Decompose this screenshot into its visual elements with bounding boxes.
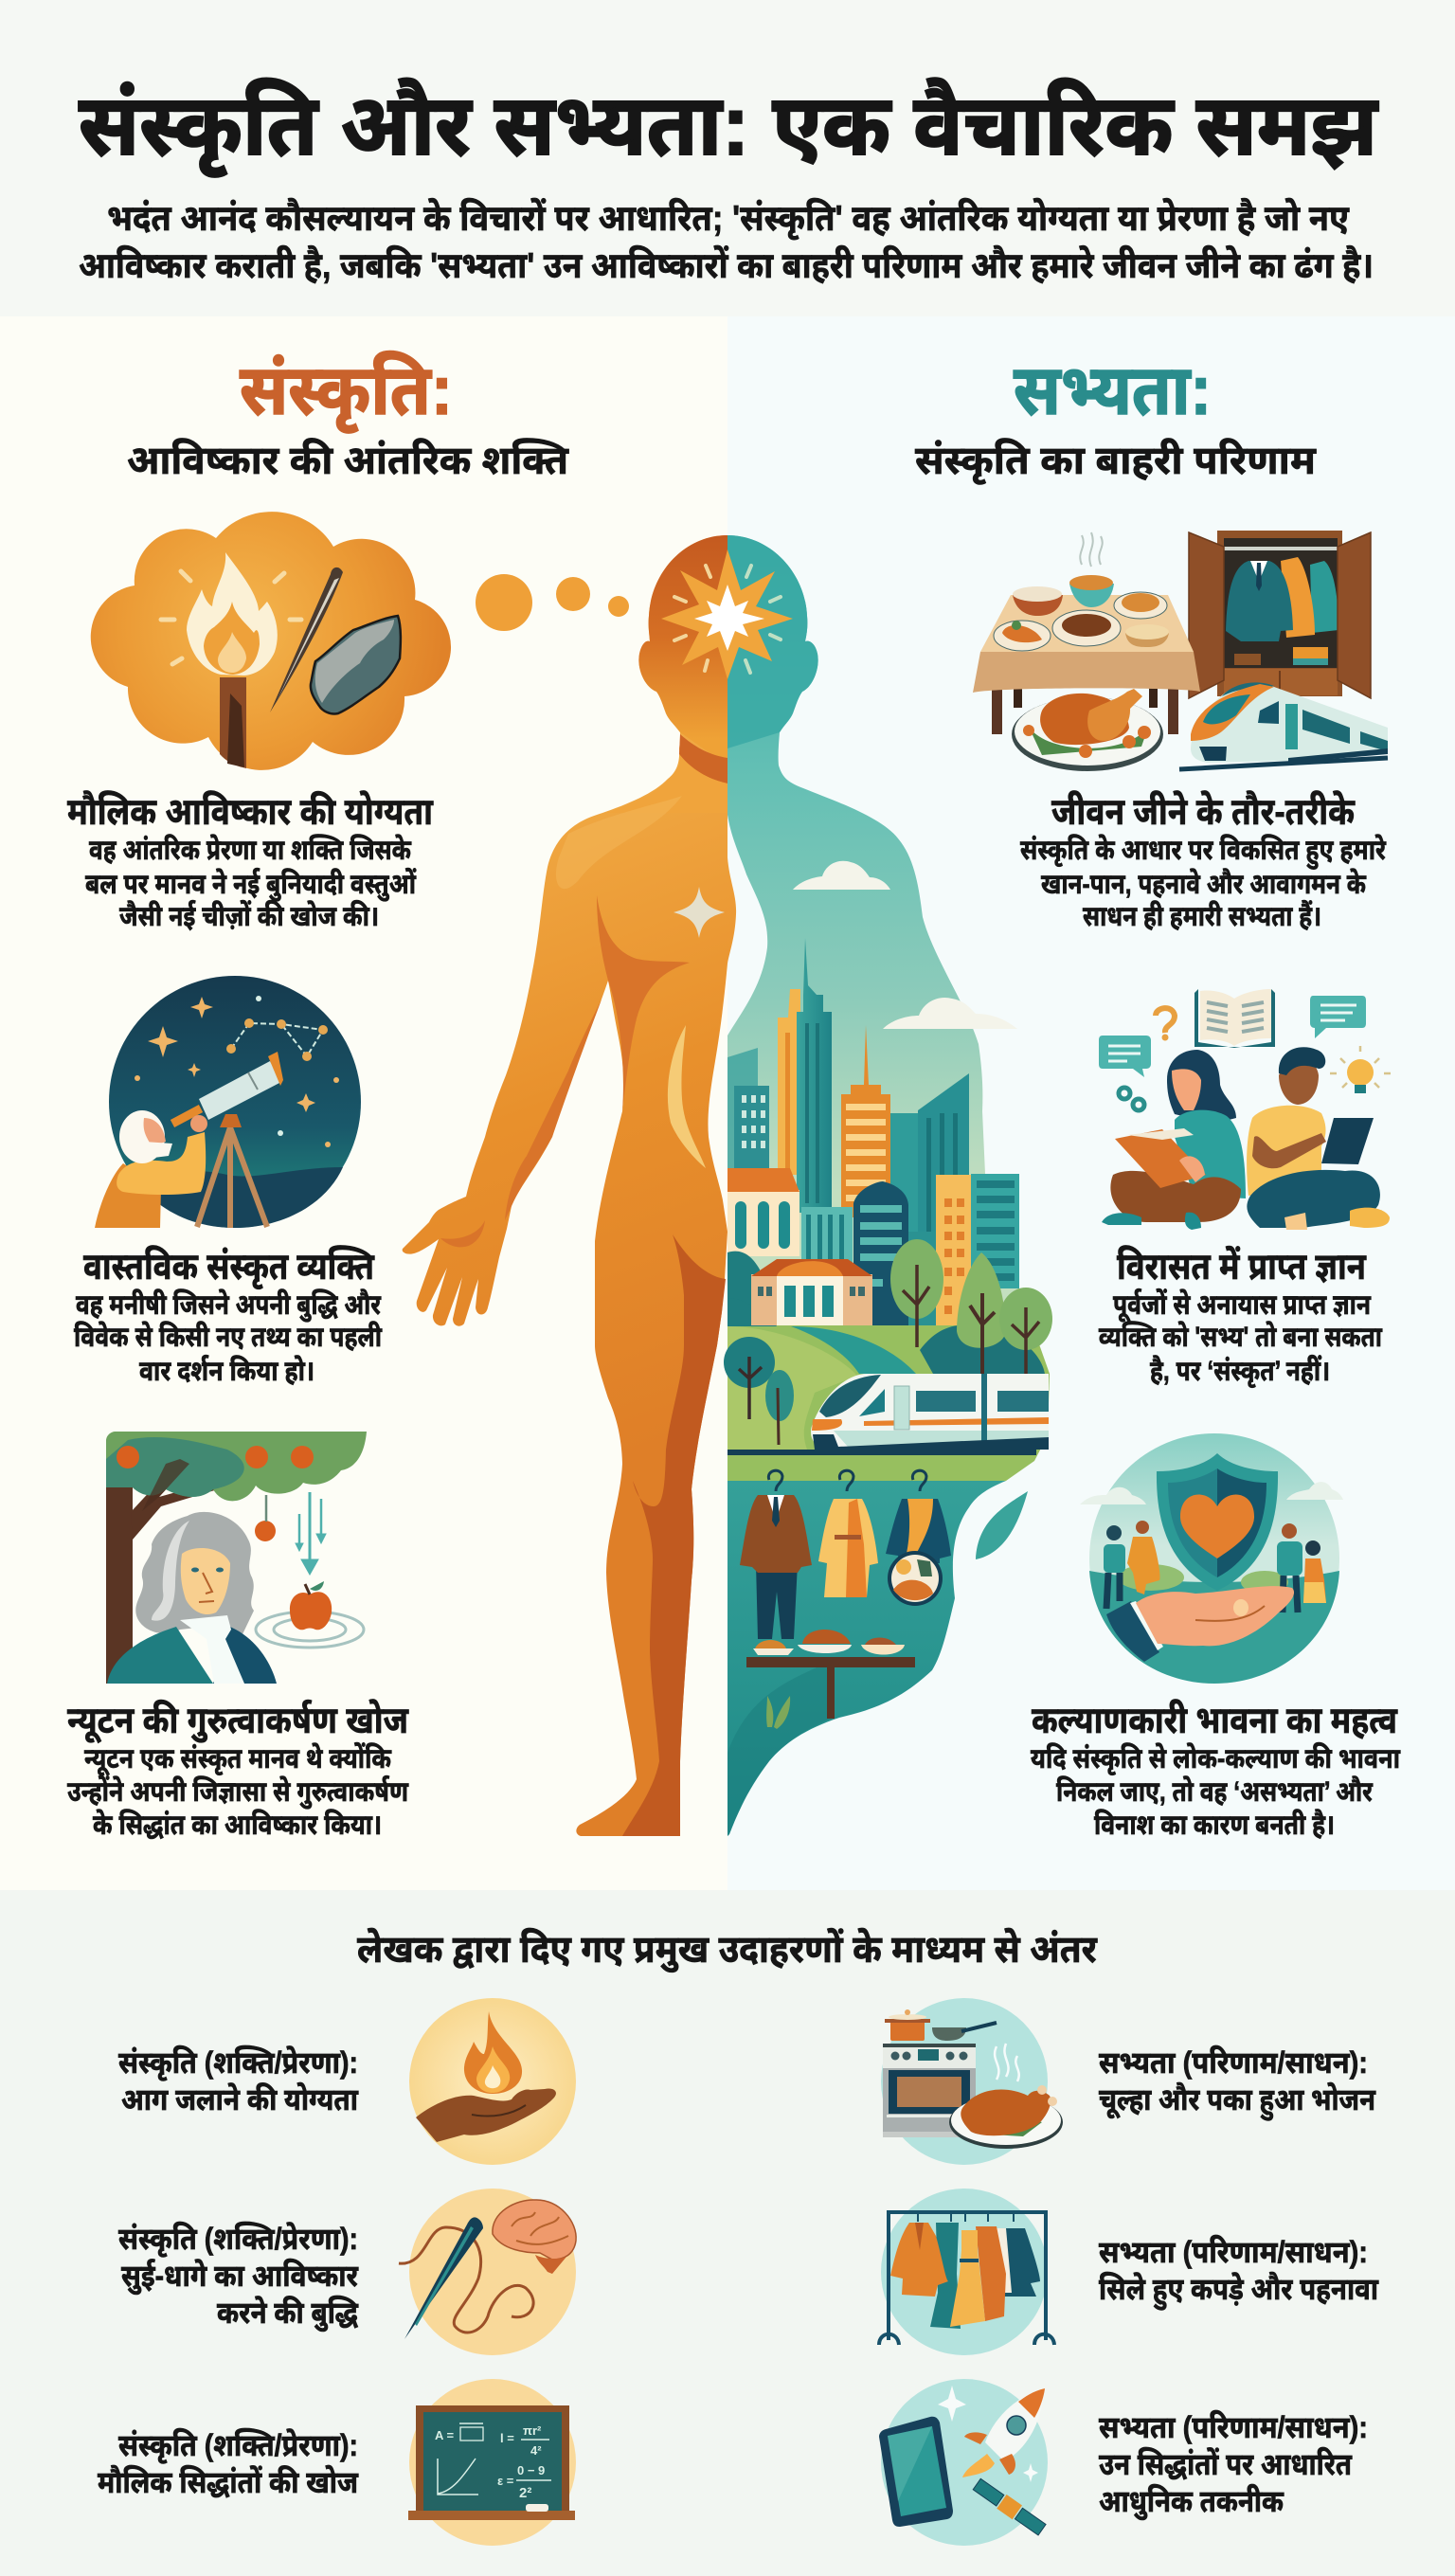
text: newton gravity discovery: न्यूटन की गुरुत्वाकर्षण खोज bbox=[67, 1700, 409, 1743]
text: ways of living bbox=[1020, 791, 1387, 932]
icon: blackboard with formulas: 0 − 9 bbox=[517, 2463, 545, 2477]
table with bowls bbox=[746, 1630, 915, 1719]
sparkle on chest bbox=[674, 887, 725, 938]
heading: sabhyata bbox=[915, 351, 1317, 485]
table bbox=[973, 595, 1200, 734]
text: true cultured person: वार दर्शन किया हो। bbox=[139, 1355, 314, 1387]
heading: sanskriti bbox=[127, 351, 569, 482]
heading: examples: लेखक द्वारा दिए गए प्रमुख उदाहरणों के माध्यम से अंतर bbox=[357, 1928, 1098, 1973]
orange half of body bbox=[403, 535, 736, 1836]
example left 1 text bbox=[118, 2045, 359, 2117]
suit on hanger bbox=[740, 1470, 812, 1639]
clouds bbox=[793, 861, 1017, 1029]
text: inherited knowledge: पूर्वजों से अनायास प्राप्त ज्ञान bbox=[1113, 1288, 1371, 1323]
needle bbox=[270, 567, 343, 712]
icon: blackboard with formulas: A = bbox=[435, 2428, 455, 2442]
light bulb bbox=[1330, 1046, 1391, 1093]
example right 2 text bbox=[1099, 2235, 1379, 2311]
shaded inner leg bbox=[622, 1234, 726, 1836]
example left 1 text: संस्कृति (शक्ति/प्रेरणा): bbox=[118, 2045, 358, 2081]
example left 1 text: आग जलाने की योग्यता bbox=[121, 2082, 359, 2117]
head split and mind burst star bbox=[661, 535, 818, 748]
panel: examples section bbox=[98, 1928, 1379, 2546]
torch with flame bbox=[161, 552, 301, 768]
coat on hanger bbox=[818, 1470, 878, 1597]
man with tablet bbox=[1247, 1047, 1390, 1230]
satellite bbox=[972, 2477, 1047, 2537]
example left 3 text: संस्कृति (शक्ति/प्रेरणा): bbox=[118, 2428, 358, 2464]
text: importance of welfare bbox=[1031, 1700, 1401, 1841]
text: true cultured person: वास्तविक संस्कृत व्यक्ति bbox=[83, 1246, 375, 1289]
small plants bbox=[766, 1696, 790, 1729]
text: original invention ability: वह आंतरिक प्रेरणा या शक्ति जिसके bbox=[89, 833, 412, 866]
example right 3 text bbox=[1099, 2410, 1368, 2520]
panel: header bbox=[79, 78, 1379, 286]
plate of food bbox=[888, 1551, 943, 1606]
heading: sanskriti: संस्कृति: bbox=[240, 351, 453, 434]
icon: needle thread and brain bbox=[399, 2189, 576, 2355]
telescope bbox=[199, 1061, 281, 1120]
icon: shield heart and caring hand bbox=[1080, 1433, 1343, 1684]
text: importance of welfare: कल्याणकारी भावना का महत्व bbox=[1032, 1700, 1398, 1741]
example right 1 text bbox=[1099, 2045, 1376, 2121]
floating leaf bbox=[976, 1491, 1028, 1559]
big apple bbox=[290, 1592, 332, 1630]
text: ways of living: खान-पान, पहनावे और आवागमन के bbox=[1041, 867, 1367, 900]
teal half of body with city scene bbox=[724, 535, 1052, 1836]
icon: blackboard with formulas: l = bbox=[500, 2431, 514, 2445]
text: ways of living: संस्कृति के आधार पर विकसित हुए हमारे bbox=[1020, 833, 1387, 870]
sparkles bbox=[938, 2386, 1038, 2482]
tripod bbox=[197, 1127, 267, 1228]
reading woman bbox=[1102, 1050, 1246, 1230]
trees bbox=[724, 1239, 1052, 1445]
icon: blackboard with formulas bbox=[408, 2379, 576, 2546]
roast chicken plate bbox=[949, 2085, 1063, 2149]
house bbox=[751, 1259, 872, 1325]
clouds bbox=[1080, 1482, 1343, 1504]
icon: blackboard with formulas: 4² bbox=[530, 2443, 542, 2458]
text: ways of living: साधन ही हमारी सभ्यता हैं। bbox=[1083, 900, 1321, 932]
newton face bbox=[181, 1548, 230, 1614]
example right 2 text: सिले हुए कपड़े और पहनावा bbox=[1099, 2272, 1379, 2311]
apples on tree bbox=[117, 1446, 314, 1541]
lower teal clothing panel bbox=[728, 1470, 1006, 1836]
text: original invention ability bbox=[67, 791, 434, 932]
tree bbox=[106, 1487, 133, 1684]
pot bbox=[885, 2009, 930, 2041]
heading: sabhyata: संस्कृति का बाहरी परिणाम bbox=[915, 438, 1317, 485]
rocket bbox=[962, 2388, 1045, 2477]
text: newton gravity discovery: न्यूटन एक संस्कृत मानव थे क्योंकि bbox=[84, 1741, 392, 1776]
astronomer figure bbox=[95, 1163, 161, 1228]
panel: sabhyata right column bbox=[973, 531, 1401, 1841]
caring hand bbox=[1106, 1586, 1294, 1662]
green landscape bbox=[728, 1252, 1050, 1481]
pan bbox=[932, 2027, 966, 2041]
text: inherited knowledge: है, पर ‘संस्कृत’ नहीं। bbox=[1150, 1354, 1330, 1389]
example right 2 text: सभ्यता (परिणाम/साधन): bbox=[1099, 2235, 1368, 2269]
icon: clothes rack bbox=[879, 2189, 1054, 2355]
subtitle bbox=[79, 197, 1374, 286]
speech bubbles bbox=[1099, 996, 1366, 1077]
constellation bbox=[226, 1018, 328, 1061]
heart bbox=[1180, 1495, 1254, 1558]
icon: newton under apple tree bbox=[106, 1432, 367, 1684]
subtitle: भदंत आनंद कौसल्यायन के विचारों पर आधारित; 'संस्कृति' वह आंतरिक योग्यता या प्रेरणा है जो नए bbox=[107, 197, 1350, 241]
text: newton gravity discovery: उन्होंने अपनी जिज्ञासा से गुरुत्वाकर्षण bbox=[67, 1774, 409, 1810]
gears bbox=[1119, 1088, 1144, 1110]
text: importance of welfare: निकल जाए, तो वह ‘असभ्यता’ और bbox=[1056, 1775, 1374, 1808]
icon: stove and roast chicken bbox=[881, 1998, 1063, 2165]
example left 2 text: सुई-धागे का आविष्कार bbox=[121, 2259, 359, 2295]
text: newton gravity discovery: के सिद्धांत का आविष्कार किया। bbox=[93, 1808, 382, 1841]
icon: blackboard with formulas: ε = bbox=[497, 2474, 514, 2488]
central figure: half orange and half teal human body bbox=[67, 512, 1401, 2546]
heading: sabhyata: सभ्यता: bbox=[1014, 351, 1212, 429]
example right 3 text: आधुनिक तकनीक bbox=[1099, 2484, 1284, 2520]
text: newton gravity discovery bbox=[67, 1700, 409, 1841]
example left 3 text bbox=[98, 2428, 359, 2499]
train bbox=[728, 1374, 1049, 1455]
text: true cultured person: वह मनीषी जिसने अपनी बुद्धि और bbox=[76, 1288, 382, 1323]
text: original invention ability: जैसी नई चीज़ों की खोज की। bbox=[119, 899, 379, 932]
example left 2 text bbox=[118, 2222, 359, 2332]
icon: thought cloud with fire needle and stone bbox=[91, 512, 451, 770]
text: inherited knowledge bbox=[1098, 1246, 1383, 1389]
newton coat and cravat bbox=[107, 1627, 213, 1684]
phone bbox=[879, 2417, 953, 2527]
example left 2 text: संस्कृति (शक्ति/प्रेरणा): bbox=[118, 2222, 358, 2258]
title: संस्कृति और सभ्यता: एक वैचारिक समझ bbox=[79, 78, 1379, 178]
ripples bbox=[256, 1612, 364, 1648]
people left bbox=[1104, 1521, 1160, 1609]
gravity arrows bbox=[296, 1492, 326, 1575]
icon: food table wardrobe and train bbox=[973, 531, 1388, 771]
roast chicken plate bbox=[1012, 689, 1163, 771]
open book bbox=[1195, 989, 1275, 1048]
modern train bbox=[1179, 682, 1388, 769]
example right 3 text: उन सिद्धांतों पर आधारित bbox=[1099, 2447, 1353, 2481]
example right 1 text: चूल्हा और पका हुआ भोजन bbox=[1099, 2082, 1376, 2121]
text: inherited knowledge: व्यक्ति को 'सभ्य' तो बना सकता bbox=[1098, 1321, 1383, 1353]
wardrobe bbox=[1189, 531, 1371, 698]
text: original invention ability: मौलिक आविष्कार की योग्यता bbox=[67, 791, 434, 833]
example left 3 text: मौलिक सिद्धांतों की खोज bbox=[98, 2465, 359, 2499]
brain bbox=[493, 2200, 576, 2274]
text: true cultured person: विवेक से किसी नए तथ्य का पहली bbox=[74, 1320, 383, 1353]
newton wig bbox=[135, 1512, 254, 1634]
garments bbox=[890, 2213, 1040, 2329]
icon: blackboard with formulas: πr² bbox=[523, 2423, 542, 2438]
question mark bbox=[1156, 1008, 1175, 1033]
icon: blackboard with formulas: 2² bbox=[519, 2485, 531, 2501]
icon: two people reading and learning bbox=[1099, 989, 1391, 1230]
city skyline bbox=[728, 938, 1019, 1326]
icon: flame in hand bbox=[409, 1998, 576, 2165]
steam bbox=[1080, 532, 1103, 567]
dishes bbox=[994, 532, 1169, 651]
thought bubbles bbox=[476, 574, 629, 631]
text: original invention ability: बल पर मानव ने नई बुनियादी वस्तुओं bbox=[85, 867, 417, 902]
example right 1 text: सभ्यता (परिणाम/साधन): bbox=[1099, 2045, 1368, 2080]
panel: sanskriti left column bbox=[67, 512, 451, 1841]
shield bbox=[1157, 1453, 1278, 1591]
stove bbox=[883, 2044, 976, 2137]
icon: phone rocket and satellite bbox=[879, 2379, 1048, 2546]
text: true cultured person bbox=[74, 1246, 383, 1387]
heading: sanskriti: आविष्कार की आंतरिक शक्ति bbox=[127, 438, 569, 482]
text: ways of living: जीवन जीने के तौर-तरीके bbox=[1051, 791, 1356, 833]
example left 2 text: करने की बुद्धि bbox=[217, 2296, 359, 2332]
people right bbox=[1277, 1523, 1326, 1612]
icon: astronomer with telescope bbox=[95, 976, 361, 1228]
jacket on hanger bbox=[886, 1470, 951, 1563]
stone bbox=[311, 616, 401, 713]
text: inherited knowledge: विरासत में प्राप्त ज्ञान bbox=[1117, 1246, 1367, 1288]
text: importance of welfare: विनाश का कारण बनती है। bbox=[1094, 1808, 1335, 1841]
steam bbox=[995, 2044, 1019, 2081]
example right 3 text: सभ्यता (परिणाम/साधन): bbox=[1099, 2410, 1368, 2444]
